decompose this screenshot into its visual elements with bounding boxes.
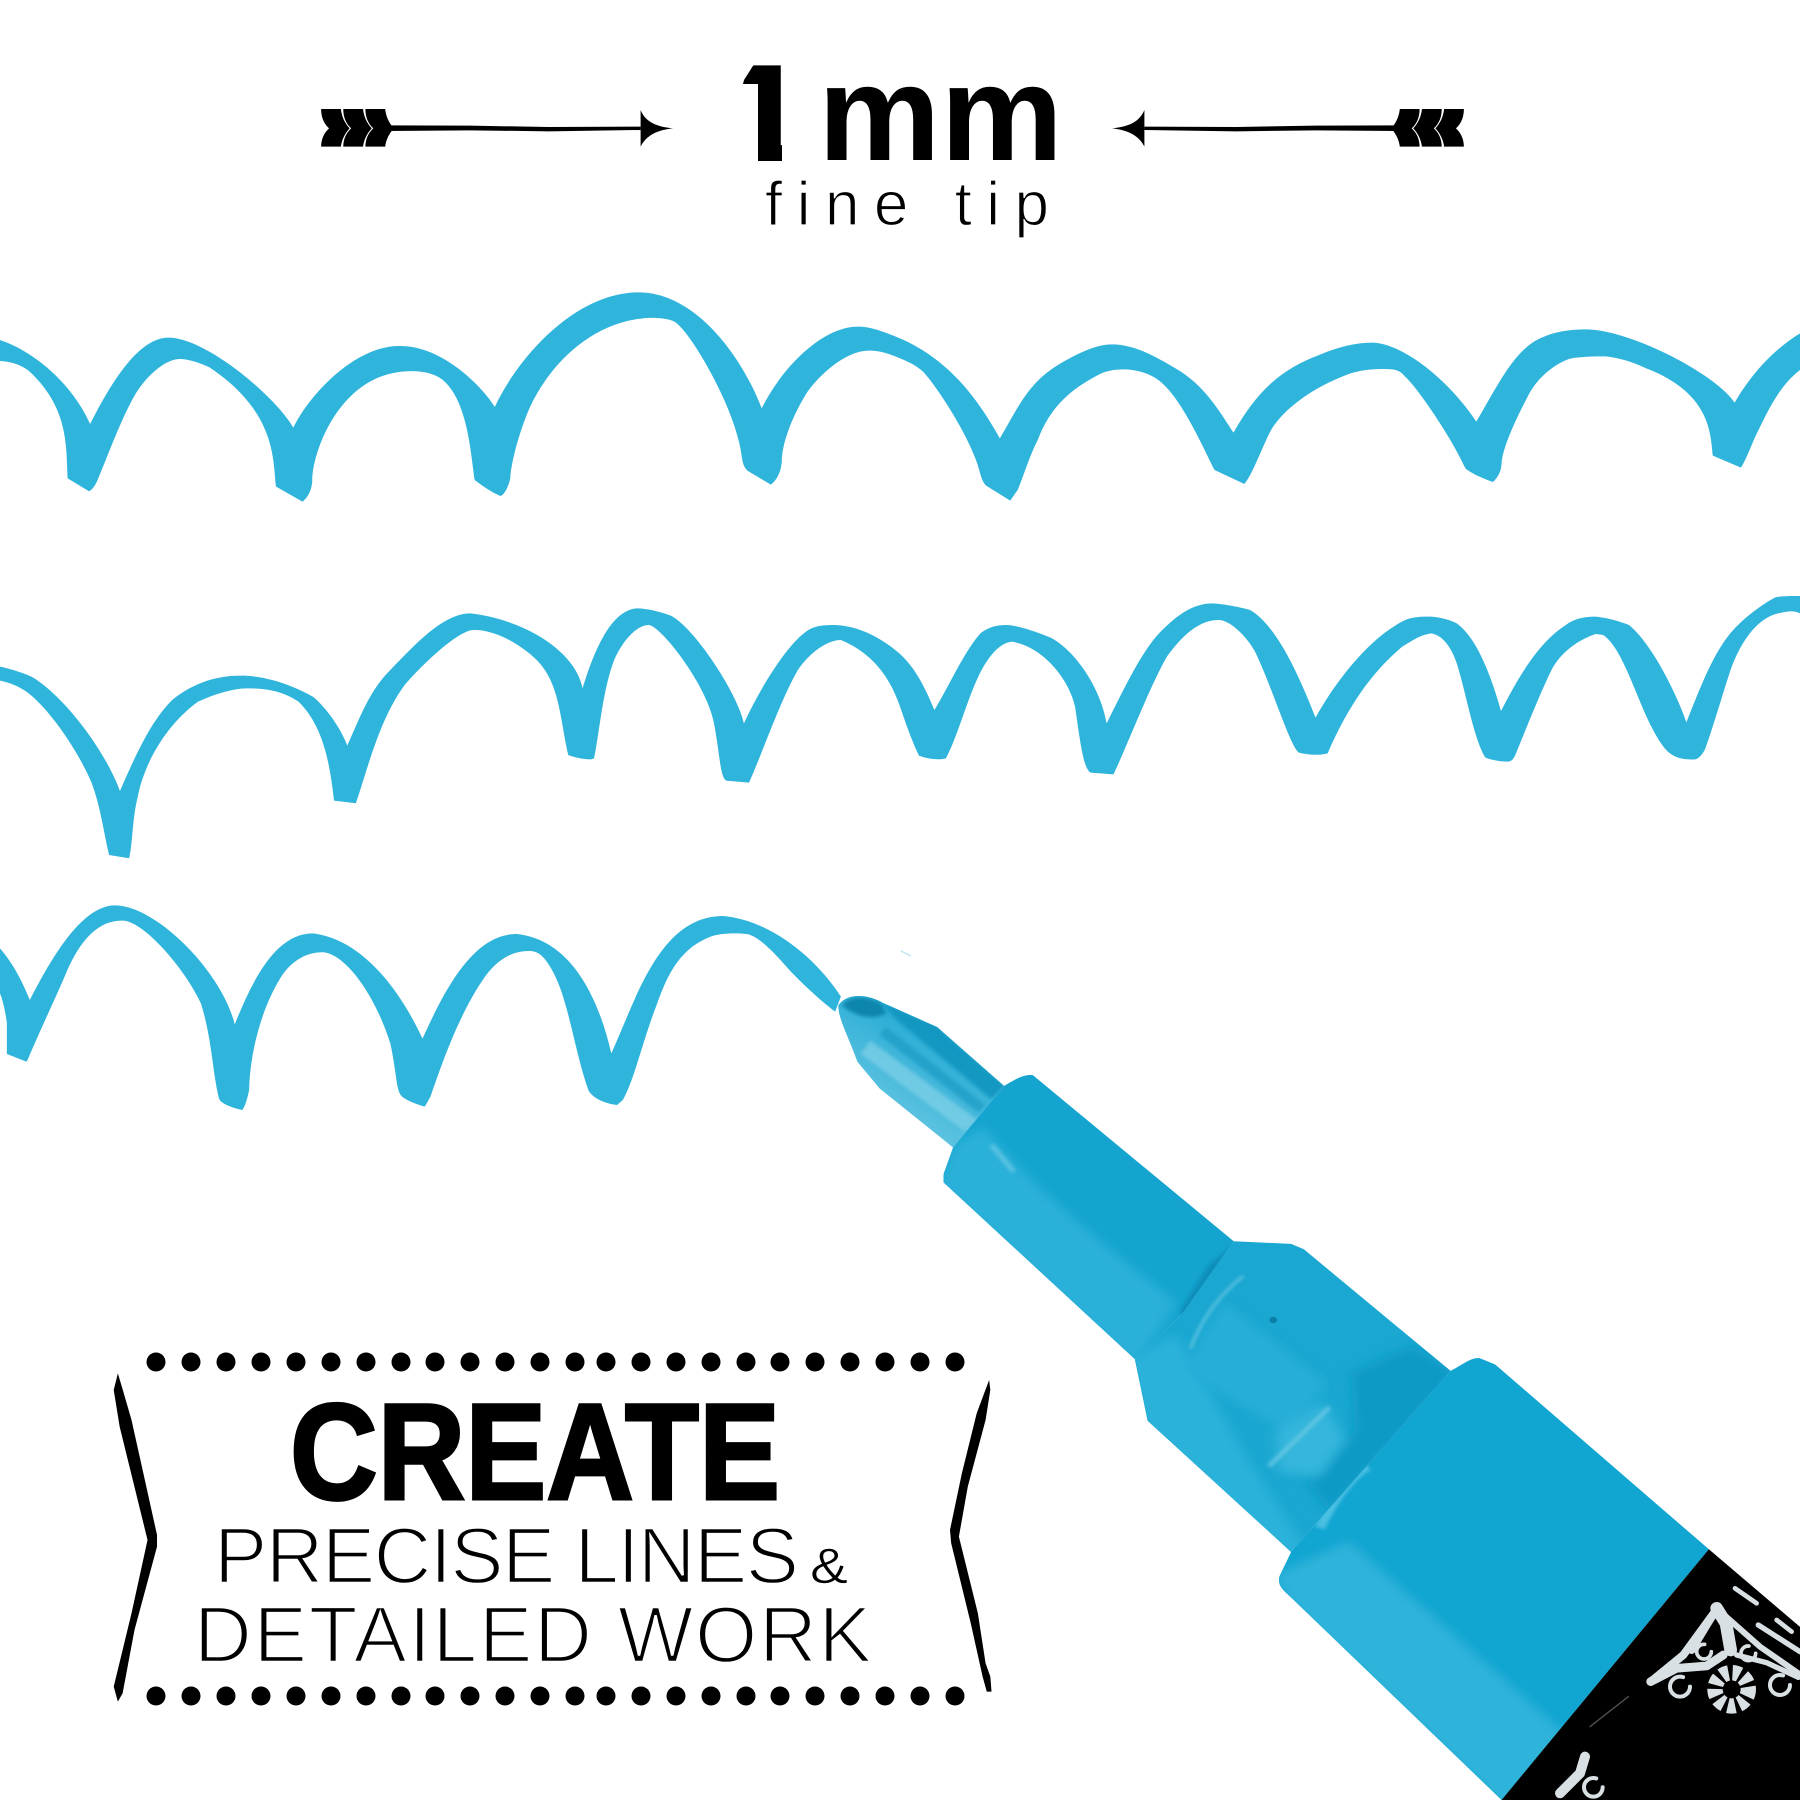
bracket left: [114, 1373, 157, 1702]
callout: create precise lines and detailed work: [114, 1352, 992, 1706]
size unit: mm: [818, 37, 1063, 189]
pen nib: [838, 996, 1004, 1147]
ampersand: &: [810, 1538, 848, 1594]
dotted rule bottom: [146, 1686, 964, 1706]
ink line: bottom row: [0, 905, 911, 1110]
size value: 1: [706, 37, 816, 189]
pen collar, middle section: [1128, 1241, 1457, 1560]
marker pen: [838, 996, 1800, 1800]
pen collar, front section: [937, 1075, 1240, 1367]
heading: 1 mm fine tip: [321, 65, 1464, 238]
subtitle: fine tip: [765, 170, 1049, 239]
dotted rule top: [146, 1352, 964, 1372]
line: precise lines: PRECISE LINES: [214, 1511, 799, 1600]
line: detailed work: DETAILED WORK: [194, 1590, 872, 1679]
pen barrel: [1502, 1549, 1800, 1800]
arrow: left, pointing inward: [321, 109, 673, 147]
arrow: right, pointing inward: [1112, 109, 1464, 147]
ink line: top row: [0, 292, 1800, 502]
bracket right: [950, 1380, 992, 1692]
pen barrel ornament: [1560, 1588, 1800, 1797]
ink line: middle row: [0, 596, 1800, 858]
pen cap: [1272, 1358, 1709, 1800]
headline: CREATE: [290, 1376, 780, 1529]
